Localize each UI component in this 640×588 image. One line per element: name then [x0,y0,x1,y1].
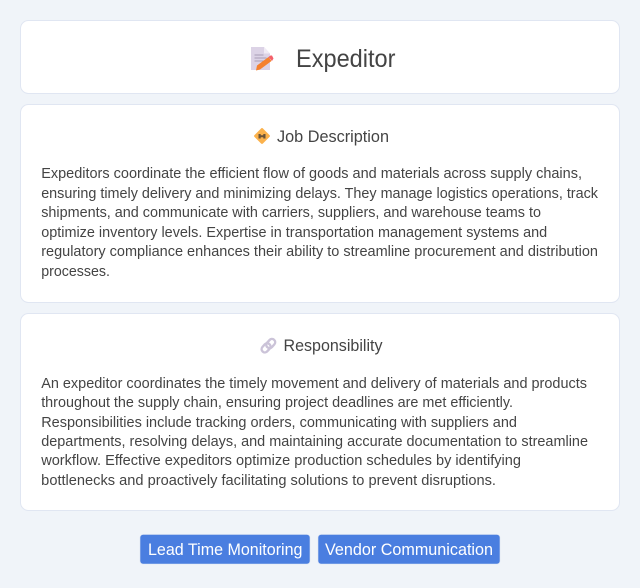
heading: responsibility: Responsibility [284,336,383,355]
tag: lead time monitoring: Lead Time Monitoring [148,540,302,559]
text block: responsibility: bottlenecks and proactively facilitating solutions to prevent disruptions. [41,473,496,489]
text block: job description: processes. [41,264,110,280]
text block: responsibility: departments, resolving delays, and maintaining accurate documentation to streamline [41,434,588,450]
text block: responsibility: workflow. Effective expeditors optimize production schedules by identifying [40,453,521,469]
text block: responsibility: An expeditor coordinates the timely movement and delivery of materials and products [41,376,587,392]
text block: responsibility: Responsibilities include tracking orders, communicating with suppliers and [41,415,517,431]
icon: orange diamond sign [254,128,270,144]
panel: title header [20,20,620,94]
text block: job description [41,166,599,280]
tag: vendor communication [318,534,500,564]
tag: vendor communication: Vendor Communication [325,540,493,559]
text block: job description: Expeditors coordinate the efficient flow of goods and materials across supply chains, [41,166,582,182]
heading: job description: Job Description [277,127,389,146]
text block: job description: regulatory compliance enhances their ability to streamline procurement and distribution [41,244,598,260]
text block: job description: shipments, and communicate with carriers, suppliers, and warehouse teams to [41,205,541,221]
text block: responsibility: throughout the supply chain, ensuring project deadlines are met efficiently. [41,395,513,411]
text block: job description: optimize inventory levels. Expertise in transportation management systems and [41,225,547,241]
icon: chain link [260,338,276,354]
panel: job description [20,104,620,302]
text block: responsibility [40,376,588,489]
text block: job description: ensuring timely delivery and minimizing delays. They manage logistics operations, track [41,186,599,202]
title: Expeditor [296,45,396,73]
icon: document with pencil [251,47,274,70]
tag: lead time monitoring [140,534,310,564]
panel: responsibility [20,314,620,510]
